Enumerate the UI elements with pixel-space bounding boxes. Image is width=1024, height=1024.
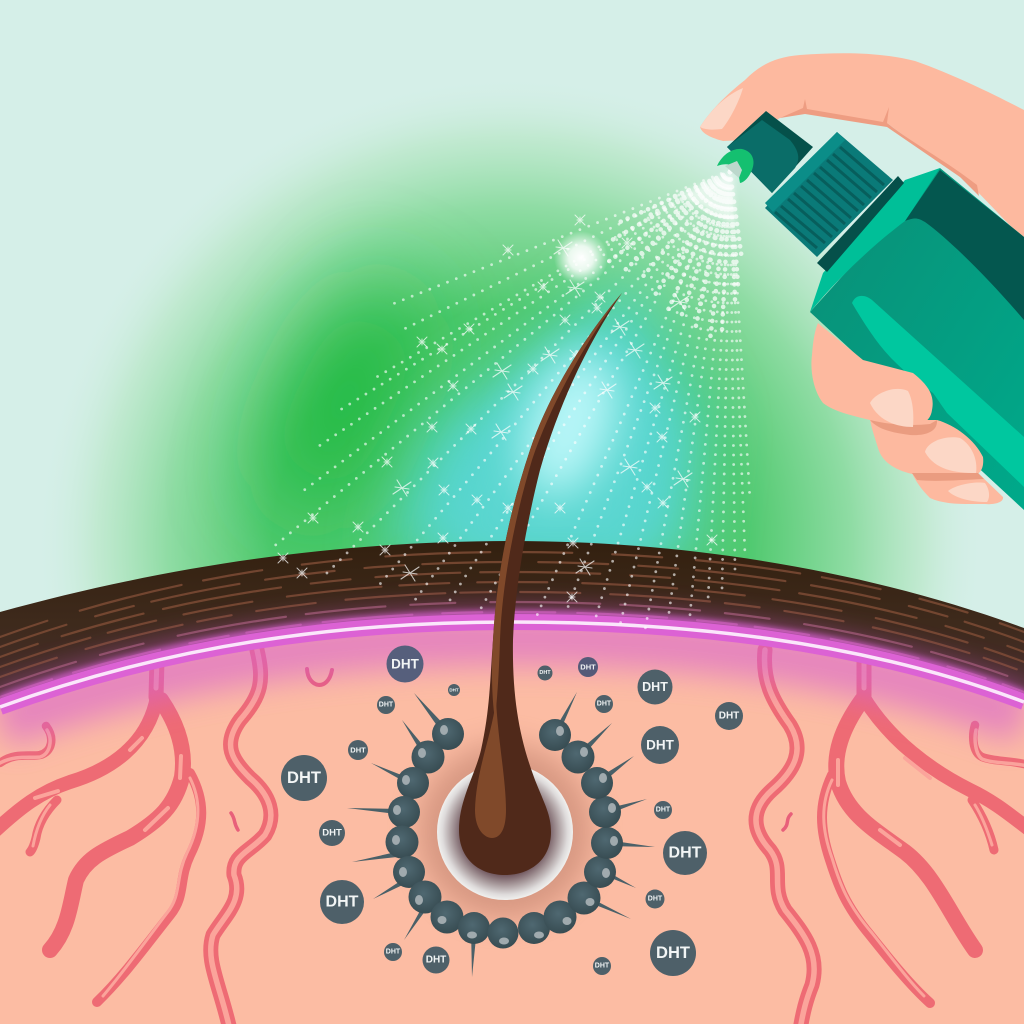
- DHT labels: DHT: [597, 700, 612, 708]
- spray mist: [272, 170, 750, 630]
- DHT labels: DHT: [648, 896, 663, 902]
- DHT labels: DHT: [350, 746, 366, 754]
- mist: dense droplet rays near nozzle: [608, 172, 742, 340]
- green nozzle: [717, 149, 754, 183]
- spikes: [347, 692, 655, 977]
- DHT labels: DHT: [646, 738, 675, 752]
- DHT labels: DHT: [326, 894, 359, 910]
- nails: [870, 389, 989, 502]
- spike ring around the follicle: [347, 692, 655, 977]
- DHT labels: DHT: [642, 680, 668, 694]
- DHT labels: DHT: [426, 954, 446, 966]
- DHT labels: DHT: [386, 948, 401, 956]
- DHT labels: DHT: [595, 962, 610, 970]
- spray bottle: [700, 53, 1024, 510]
- bottle light stripe: [852, 296, 1024, 487]
- mist: core spray cone: [680, 172, 735, 225]
- blood vessels right: [756, 650, 1024, 1024]
- ribbed collar: [765, 132, 893, 257]
- DHT labels: DHT: [580, 662, 596, 672]
- DHT labels: [287, 656, 739, 970]
- bottle body: [810, 168, 1024, 510]
- DHT labels: DHT: [322, 828, 342, 838]
- DHT labels: DHT: [539, 670, 551, 676]
- middle finger: [870, 420, 983, 474]
- cyan glow under the spray: [385, 280, 705, 560]
- hair strand and bulb: [459, 293, 622, 875]
- collar base ring: [817, 176, 904, 272]
- DHT large: [281, 646, 743, 976]
- vessel: left thick branches: [0, 650, 271, 1024]
- DHT labels: DHT: [669, 844, 702, 862]
- skin layer: [0, 615, 1024, 1024]
- pump cap: [727, 111, 813, 193]
- DHT labels: DHT: [391, 656, 420, 672]
- DHT labels: DHT: [719, 710, 739, 722]
- finger crease: [870, 420, 937, 435]
- DHT labels: DHT: [379, 702, 394, 708]
- vessel: right thick branches: [756, 650, 1024, 1024]
- ring finger: [912, 473, 1003, 504]
- fingernail: [700, 88, 743, 130]
- DHT labels: DHT: [656, 944, 690, 962]
- hair shaft highlight: [492, 293, 622, 720]
- DHT labels: DHT: [287, 769, 321, 787]
- DHT small: [348, 657, 672, 975]
- finger underside shadow: [780, 99, 979, 196]
- beads: [386, 718, 623, 948]
- blood vessels left: [0, 650, 271, 1024]
- small capillary fragments: [231, 669, 791, 830]
- ring finger crease: [912, 473, 984, 481]
- DHT labels: DHT: [656, 806, 671, 814]
- mist: far droplet rays: [272, 170, 750, 630]
- lens flare: [554, 231, 608, 285]
- sparkles: [278, 215, 717, 602]
- magenta skin barrier line: [0, 617, 1024, 722]
- bottle shoulder: [810, 168, 940, 312]
- DHT labels: DHT: [449, 688, 459, 692]
- follicle socket: [417, 744, 593, 920]
- index finger: [700, 53, 1024, 240]
- vessel: right highlights: [756, 650, 1024, 1024]
- lower palm: [811, 323, 933, 427]
- nozzle tip: [725, 161, 742, 178]
- scalp band: [0, 541, 1024, 707]
- bead highlights: [392, 725, 618, 944]
- vessel: left highlights: [0, 650, 271, 1024]
- bottle dark side: [905, 170, 1024, 320]
- DHT molecules: [281, 646, 743, 976]
- bulb highlight: [475, 700, 506, 838]
